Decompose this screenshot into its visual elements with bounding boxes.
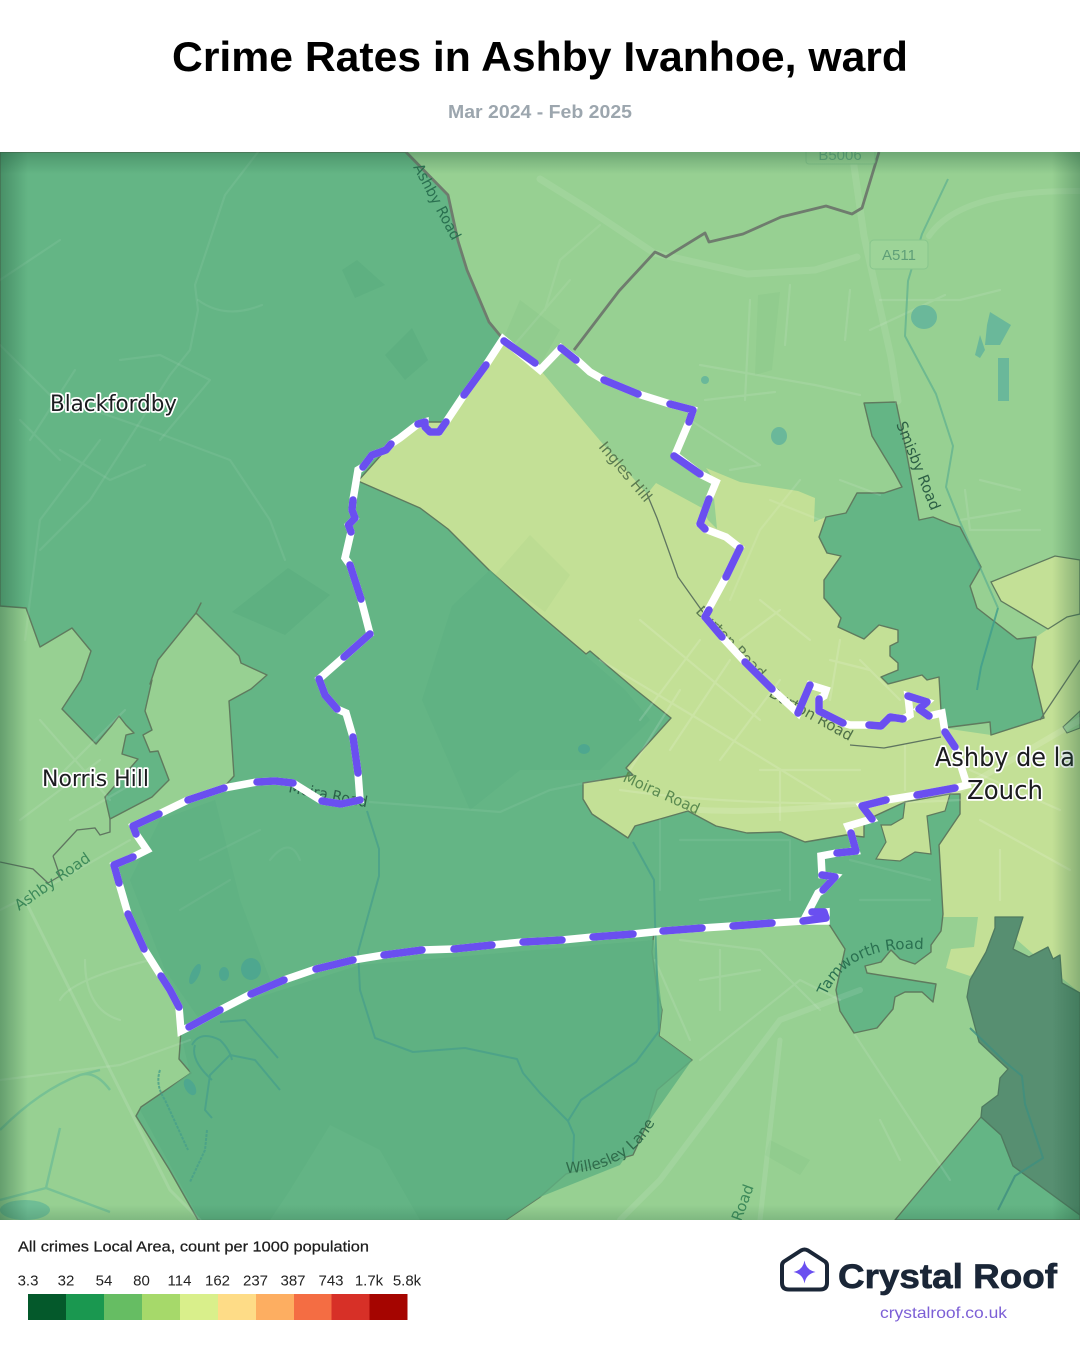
zone: yellow-green town area [358,339,1080,993]
zone: dark green south-east corner [967,917,1080,1215]
road shield: B5006 [806,152,876,164]
place label: Blackfordby: Blackfordby [50,392,177,417]
zone: yellow island south of town [876,794,950,861]
ward outline: purple dashes [114,341,955,1027]
label: Moira Road west: Moira Road [287,778,369,811]
legend tick labels: 32 [58,1272,74,1290]
label: Tamworth Road: Tamworth Road [816,938,922,992]
streets network [0,152,1080,1220]
title: Crime Rates in Ashby Ivanhoe, ward [172,33,908,80]
zone: mid green north-east finger [819,402,1044,735]
legend tick labels: 237 [243,1272,268,1290]
road shield: A511: A511 [882,247,916,264]
label: Road south: Road [728,1182,758,1223]
zone: yellow-green north-east patch [991,556,1080,629]
legend tick labels: 54 [96,1272,112,1290]
place label: Norris Hill: Norris Hill [42,767,149,792]
label: Burton Road lower: Burton Road [766,684,856,745]
darker land patches [130,260,692,1220]
legend tick labels: 5.8k [393,1272,422,1290]
label: Smisby Road: Smisby Road [892,419,944,513]
legend tick labels: 80 [133,1272,150,1290]
place label: Ashby de la Zouch [935,743,1075,806]
road shield: B5006: B5006 [818,147,862,164]
legend tick labels: 1.7k [355,1272,384,1290]
lighter patch south [270,1125,420,1220]
website link: crystalroof.co.uk [880,1305,1008,1322]
zone: mid green south-east [895,1117,1080,1220]
logo: Crystal Roof [782,1250,1058,1322]
label: Ashby Road north: Ashby Road [409,160,465,243]
choropleth map [0,152,1080,1220]
legend tick labels: 162 [205,1272,230,1290]
legend tick labels: 387 [280,1272,306,1290]
icon: house with star [782,1250,827,1290]
label: Ashby Road west: Ashby Road [11,849,94,914]
ward outline: white [114,339,967,1031]
label: Ingles Hill: Ingles Hill [595,438,656,506]
boundary: thick upper road line [406,152,879,350]
zone: mid green west and south ward area [0,152,960,1220]
legend tick labels: 743 [318,1272,344,1290]
road shield: A511 [870,240,928,269]
legend colour scale [28,1294,408,1320]
subtitle: date range: Mar 2024 - Feb 2025 [448,102,632,122]
legend title: All crimes Local Area, count per 1000 population [18,1238,369,1256]
light green shaded patches [505,292,810,1175]
road labels [16,166,946,1264]
label: Willesley Lane: Willesley Lane [566,1120,654,1173]
legend tick labels: 3.3 [18,1272,38,1290]
legend tick labels: 114 [168,1272,191,1290]
legend tick labels [18,1272,422,1290]
yellow-green shaded patch [495,535,570,612]
legend [18,1238,422,1320]
zone: light patch east [1063,711,1080,733]
ward boundary [114,339,967,1031]
label: Moira Road east: Moira Road [620,768,703,818]
label: Burton Road upper: Burton Road [692,602,770,682]
place label: Ashby de la Zouch: Zouch [967,776,1043,806]
map vignette [0,152,1080,1220]
streams and ponds [0,179,1043,1212]
boundary: Burton Road and Ingles Hill lines [0,494,1080,883]
logo wordmark: Crystal Roof [838,1258,1058,1296]
zone: light green base [0,152,1080,1220]
